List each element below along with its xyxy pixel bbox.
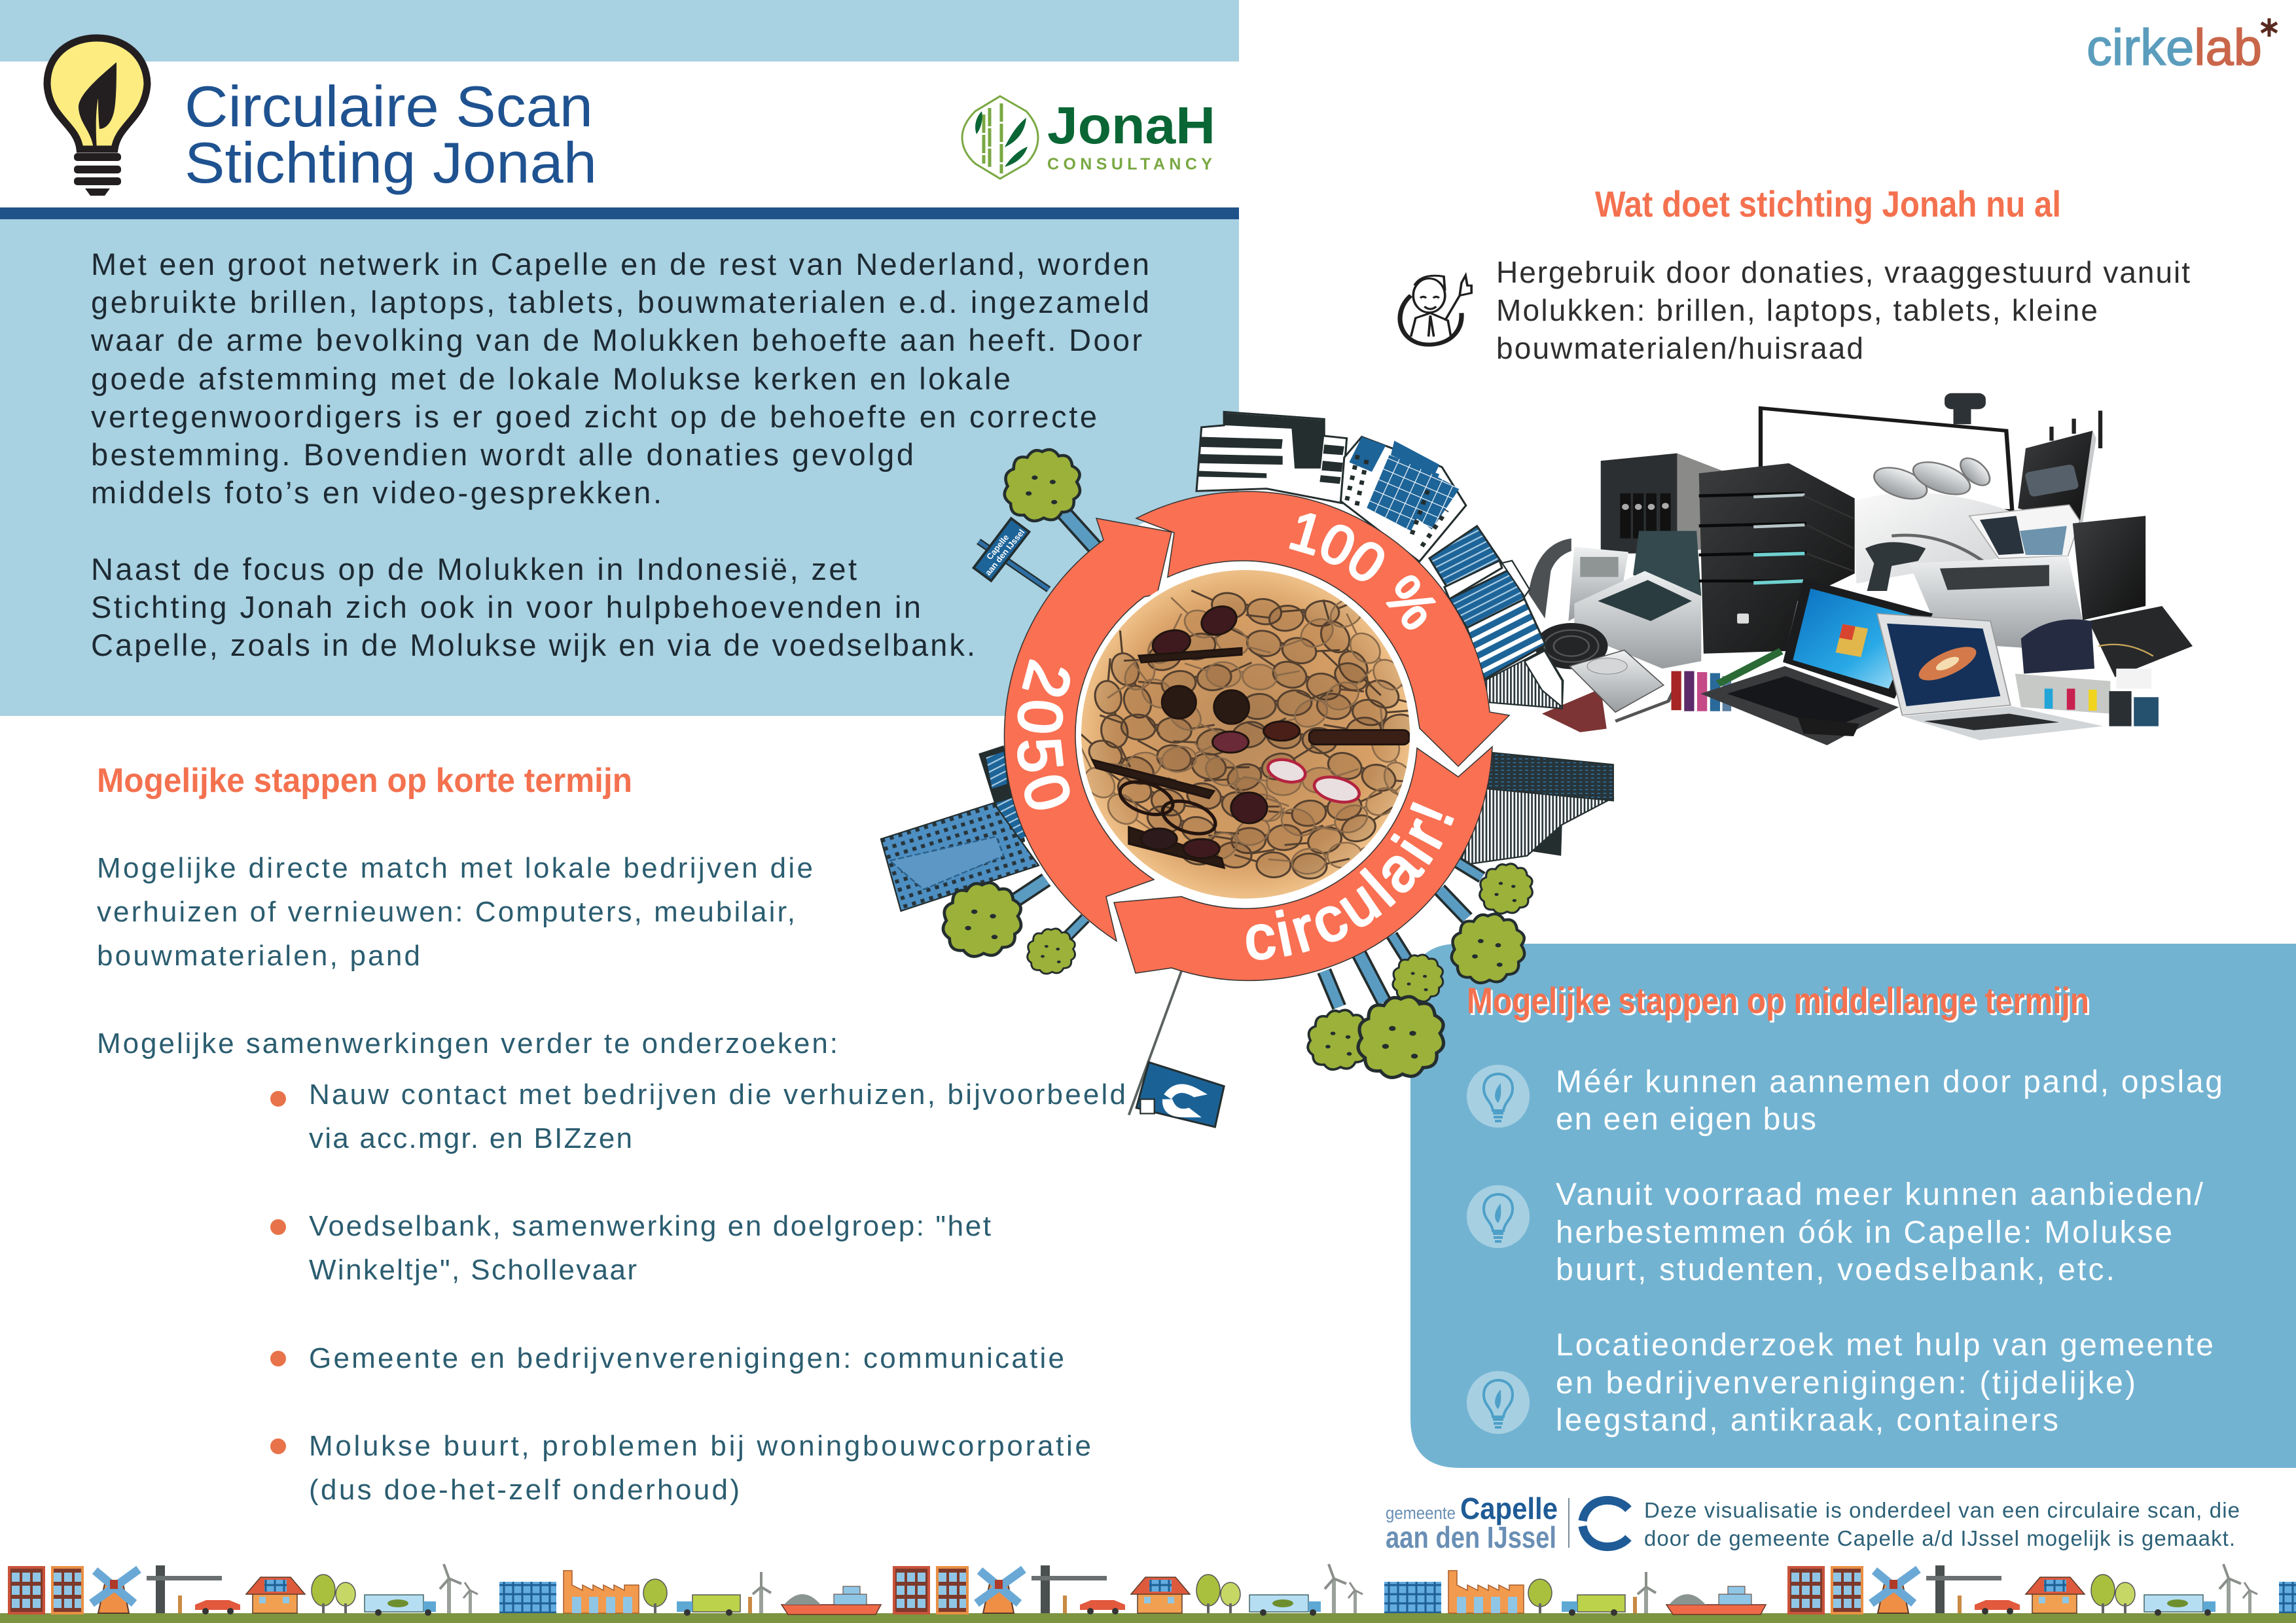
building: black and white tower bbox=[1196, 412, 1347, 503]
icon: scanner bbox=[1865, 542, 1926, 591]
icon: toner and ink system bbox=[2015, 606, 2193, 726]
icon: light bulb logo bbox=[47, 38, 147, 196]
illustration: pile of electronics bbox=[1528, 393, 2193, 745]
tree: lower left small bbox=[1028, 918, 1085, 974]
bullet item: municipality: Gemeente en bedrijvenverenigingen: communicatie bbox=[309, 1342, 1064, 1374]
text: current reuse activities bbox=[1496, 255, 2190, 365]
sign: Capelle aan den IJssel: Capelle bbox=[984, 533, 1011, 562]
circular city illustration bbox=[880, 411, 1615, 1128]
photo: wooden bowl with used glasses bbox=[1081, 570, 1410, 899]
text: footer credit bbox=[1644, 1498, 2240, 1550]
bullet item: food bank: Voedselbank, samenwerking en doelgroep: "het bbox=[309, 1210, 991, 1242]
icon: inkjet printer bbox=[1574, 531, 1701, 669]
icon: tower computer bbox=[1699, 463, 1855, 654]
item: more intake: en een eigen bus bbox=[1556, 1102, 1816, 1137]
panel: intro header and background bbox=[0, 0, 1239, 716]
icon: laser printer bbox=[1909, 556, 2083, 651]
tree: lower left large bbox=[943, 880, 1046, 956]
sign: Capelle aan den IJssel bbox=[973, 518, 1049, 590]
text: direct match: Mogelijke directe match met lokale bedrijven die bbox=[97, 852, 813, 884]
sign: Capelle aan den IJssel: aan den IJssel bbox=[983, 527, 1026, 577]
building: bottom right hatched bbox=[1460, 753, 1613, 865]
text: current reuse activities: Molukken: brillen, laptops, tablets, kleine bbox=[1496, 293, 2098, 327]
text: current reuse activities: Hergebruik door donaties, vraaggestuurd vanuit bbox=[1496, 255, 2190, 289]
tree: top left bbox=[1005, 450, 1095, 547]
item: location research: en bedrijvenverenigingen: (tijdelijke) bbox=[1556, 1366, 2136, 1400]
arrow: top right 100% bbox=[1136, 491, 1509, 766]
white base of the circular ring bbox=[1009, 499, 1483, 973]
text: current reuse activities: bouwmaterialen/huisraad bbox=[1496, 331, 1863, 365]
intro text block: goede afstemming met de lokale Molukse kerken en lokale bbox=[91, 361, 1011, 396]
bullet item: relocating companies: Nauw contact met bedrijven die verhuizen, bijvoorbeeld bbox=[309, 1079, 1126, 1111]
intro text block: gebruikte brillen, laptops, tablets, bouwmaterialen e.d. ingezameld bbox=[91, 285, 1149, 319]
item: stock offering: herbestemmen óók in Capelle: Molukse bbox=[1556, 1215, 2172, 1250]
intro text block bbox=[90, 247, 1149, 662]
logo: circular fish bbox=[1583, 1500, 1628, 1547]
bullet item: Moluccan neighbourhood bbox=[270, 1430, 1091, 1506]
text: direct match bbox=[97, 852, 813, 972]
logo: gemeente Capelle aan den IJssel: aan den IJssel bbox=[1386, 1520, 1556, 1554]
ring label: 100%: 100 % bbox=[1289, 513, 1436, 630]
ring label: circulair: circulair! bbox=[1246, 802, 1454, 960]
heading: short term steps: Mogelijke stappen op korte termijn bbox=[97, 762, 632, 800]
logo: Jonah Consultancy: JonaH bbox=[1047, 96, 1215, 154]
logo: cirkelab: cirkelab bbox=[2087, 18, 2262, 76]
item: stock offering bbox=[1467, 1177, 2204, 1287]
icon: windows laptop bbox=[1700, 579, 1933, 745]
arrow: bottom circulair bbox=[1114, 747, 1492, 980]
item: location research bbox=[1467, 1328, 2214, 1438]
text: direct match: bouwmaterialen, pand bbox=[97, 940, 420, 972]
item: location research: leegstand, antikraak, containers bbox=[1556, 1403, 2058, 1438]
icon: ink bottles bbox=[1671, 651, 1781, 711]
logo: Jonah Consultancy bbox=[962, 96, 1215, 179]
item: location research: Locatieonderzoek met hulp van gemeente bbox=[1556, 1328, 2214, 1363]
icon: external drive bbox=[2073, 516, 2145, 620]
building: left blue complex bbox=[881, 745, 1039, 911]
text: footer credit: door de gemeente Capelle a/d IJssel mogelijk is gemaakt. bbox=[1644, 1526, 2235, 1550]
intro text block: middels foto’s en video-gesprekken. bbox=[91, 475, 662, 510]
intro text block: Capelle, zoals in de Molukse wijk en via de voedselbank. bbox=[91, 628, 975, 662]
text: footer credit: Deze visualisatie is onderdeel van een circulaire scan, die bbox=[1644, 1498, 2240, 1522]
tree: lower right group bbox=[1308, 862, 1532, 1077]
list: possible collaborations bbox=[270, 1079, 1126, 1506]
logo: gemeente Capelle aan den IJssel bbox=[1386, 1491, 1570, 1554]
item: more intake bbox=[1467, 1065, 2223, 1137]
intro text block: Naast de focus op de Molukken in Indonesië, zet bbox=[91, 552, 857, 586]
panel: medium term steps background bbox=[1410, 944, 2296, 1468]
title: Stichting Jonah bbox=[185, 130, 597, 195]
bullet item: food bank bbox=[270, 1210, 991, 1286]
logo: gemeente Capelle aan den IJssel: gemeente bbox=[1386, 1503, 1456, 1523]
logo: Jonah Consultancy: CONSULTANCY bbox=[1047, 155, 1212, 173]
building: hatched wedge bbox=[1484, 649, 1563, 709]
logo: gemeente Capelle aan den IJssel: Capelle bbox=[1460, 1491, 1558, 1525]
arrow: left 2050 bbox=[1004, 518, 1172, 941]
bullet item: food bank: Winkeltje", Schollevaar bbox=[309, 1254, 637, 1286]
flag bbox=[1129, 971, 1224, 1127]
bullet item: Moluccan neighbourhood: (dus doe-het-zelf onderhoud) bbox=[309, 1474, 740, 1506]
text: direct match: verhuizen of vernieuwen: Computers, meubilair, bbox=[97, 896, 795, 928]
intro text block: waar de arme bevolking van de Molukken behoefte aan heeft. Door bbox=[90, 323, 1142, 357]
title bbox=[185, 74, 597, 195]
intro text block: bestemming. Bovendien wordt alle donaties gevolgd bbox=[91, 437, 914, 472]
icon: hard disk and graphics card bbox=[1542, 650, 1676, 732]
intro text block: Stichting Jonah zich ook in voor hulpbehoevenden in bbox=[91, 590, 921, 624]
item: more intake: Méér kunnen aannemen door pand, opslag bbox=[1556, 1065, 2223, 1099]
icon: macbook bbox=[1877, 613, 2104, 740]
item: stock offering: buurt, studenten, voedselbank, etc. bbox=[1556, 1253, 2115, 1287]
icon: cable coil bbox=[1535, 623, 1608, 669]
icon: phone bbox=[1528, 539, 1628, 621]
icon: tablet bbox=[1969, 505, 2080, 558]
icon: monitor and webcam bbox=[1761, 393, 2012, 511]
building: blue grid apartment bbox=[1340, 437, 1466, 562]
intro text block: vertegenwoordigers is er goed zicht op de behoefte en correcte bbox=[91, 399, 1097, 434]
bullet item: Moluccan neighbourhood: Molukse buurt, problemen bij woningbouwcorporatie bbox=[309, 1430, 1091, 1462]
ring label: 2050: 2050 bbox=[1017, 659, 1071, 810]
icon: NAS server bbox=[1601, 454, 1723, 554]
bullet item: relocating companies: via acc.mgr. en BIZzen bbox=[309, 1122, 632, 1154]
title: Circulaire Scan bbox=[185, 74, 593, 139]
icon: man with thumbs up bbox=[1400, 276, 1471, 345]
building: blue striped blocks bbox=[1429, 526, 1545, 679]
text: collaborations intro: Mogelijke samenwerkingen verder te onderzoeken: bbox=[97, 1027, 838, 1060]
icon: white organic object and silver lenses bbox=[1854, 454, 2009, 584]
item: stock offering: Vanuit voorraad meer kunnen aanbieden/ bbox=[1556, 1177, 2204, 1212]
intro text block: Met een groot netwerk in Capelle en de rest van Nederland, worden bbox=[91, 247, 1149, 281]
heading: wat doet stichting Jonah nu al: Wat doet stichting Jonah nu al bbox=[1595, 183, 2061, 224]
bottom city skyline strip bbox=[0, 1564, 2296, 1623]
icon: router bbox=[2018, 411, 2100, 524]
bullet item: relocating companies bbox=[270, 1079, 1126, 1154]
heading: medium term steps: Mogelijke stappen op middellange termijn bbox=[1467, 980, 2089, 1021]
city ring buildings and trees bbox=[881, 412, 1613, 1127]
